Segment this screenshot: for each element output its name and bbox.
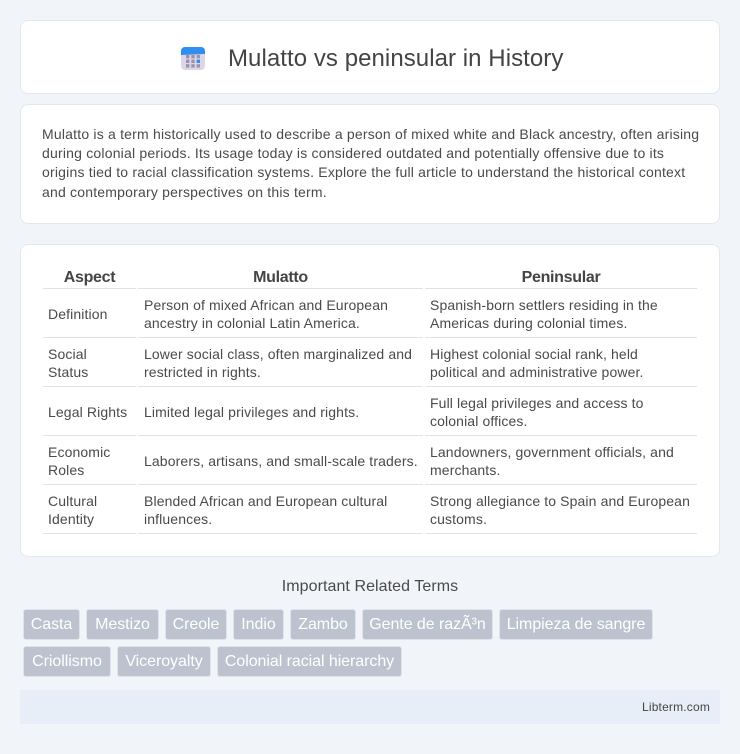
intro text: during colonial periods. Its usage today is considered outdated and potentially offensive due to its (42, 145, 664, 161)
table: colonial offices. (430, 413, 528, 429)
related terms tags: Colonial racial hierarchy (225, 653, 394, 670)
related terms tags: Limpieza de sangre (507, 616, 645, 633)
table: Roles (48, 462, 84, 478)
table: Peninsular (522, 269, 600, 286)
table: Laborers, artisans, and small-scale traders. (144, 453, 418, 469)
footer bar (20, 690, 720, 724)
header panel (20, 20, 720, 94)
intro text: origins tied to racial classification systems. Explore the full article to understand the historical context (42, 164, 685, 180)
title: Mulatto vs peninsular in History (228, 44, 563, 72)
related terms tags: Gente de razÃ³n (369, 616, 486, 633)
related terms tags: Creole (173, 616, 219, 633)
table: Landowners, government officials, and (430, 444, 674, 460)
table: Economic (48, 444, 110, 460)
table: Cultural (48, 493, 97, 509)
table: Limited legal privileges and rights. (144, 404, 359, 420)
table: Social (48, 346, 87, 362)
related terms tags: Viceroyalty (125, 653, 203, 670)
table: customs. (430, 511, 487, 527)
comparison table panel (20, 244, 720, 557)
related terms tags: Criollismo (32, 653, 102, 670)
intro text: and contemporary perspectives on this term. (42, 184, 327, 200)
table: Full legal privileges and access to (430, 395, 644, 411)
icon: calendar (181, 47, 205, 70)
table: Highest colonial social rank, held (430, 346, 638, 362)
related terms tags: Zambo (298, 616, 348, 633)
table: Legal Rights (48, 404, 127, 420)
table: Person of mixed African and European (144, 297, 388, 313)
table: political and administrative power. (430, 364, 644, 380)
table: restricted in rights. (144, 364, 261, 380)
table: Lower social class, often marginalized and (144, 346, 412, 362)
table: Blended African and European cultural (144, 493, 387, 509)
table: Definition (48, 306, 108, 322)
table: ancestry in colonial Latin America. (144, 315, 360, 331)
table: Spanish-born settlers residing in the (430, 297, 658, 313)
intro text (42, 126, 699, 200)
related terms tags: Casta (31, 616, 72, 633)
table: Americas during colonial times. (430, 315, 627, 331)
intro panel (20, 104, 720, 224)
table: Aspect (64, 269, 115, 286)
footer credit: Libterm.com (642, 700, 710, 714)
table: Mulatto (253, 269, 308, 286)
table: influences. (144, 511, 212, 527)
related terms tags (23, 609, 653, 677)
related terms heading: Important Related Terms (282, 578, 458, 595)
related terms tags: Indio (241, 616, 276, 633)
table (43, 269, 697, 534)
related terms tags: Mestizo (95, 616, 150, 633)
table: Status (48, 364, 88, 380)
table: Identity (48, 511, 94, 527)
table: merchants. (430, 462, 500, 478)
table: Strong allegiance to Spain and European (430, 493, 690, 509)
intro text: Mulatto is a term historically used to describe a person of mixed white and Black ancestry, often arising (42, 126, 699, 142)
